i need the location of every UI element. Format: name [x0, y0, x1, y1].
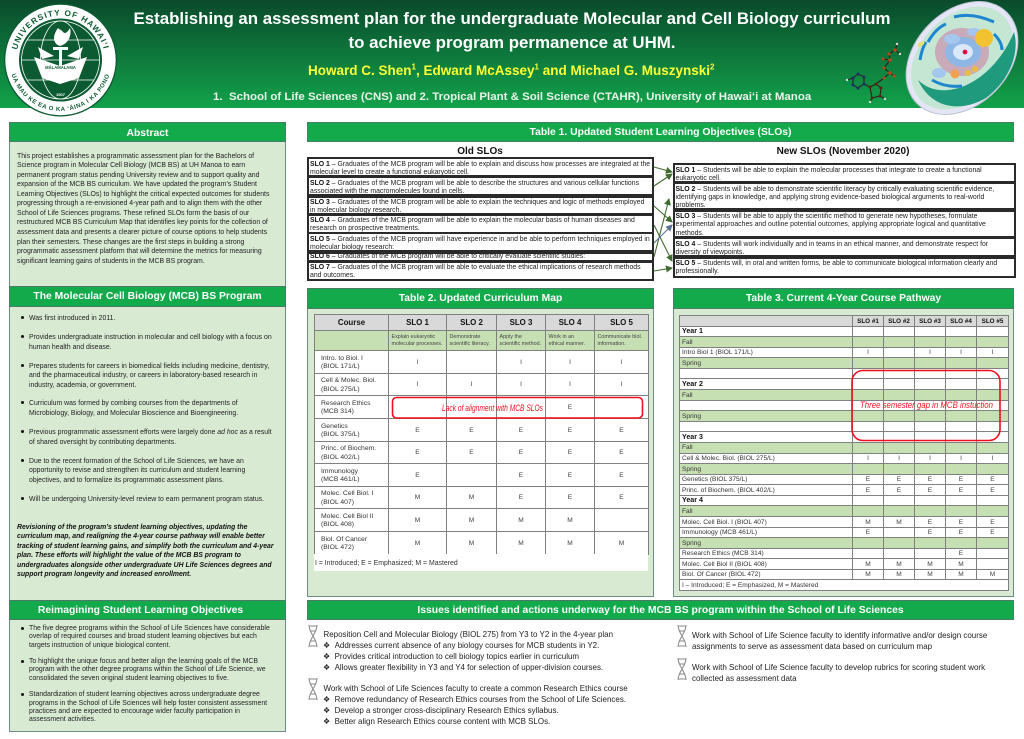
program bullet list: objectives, and to formalize its programmatic assessment plans.	[29, 476, 224, 484]
program bullet list: human health and disease.	[29, 344, 112, 350]
new SLO list: identifying gaps in knowledge, and applying strong evidence-based biological arguments to real-world	[676, 194, 984, 201]
old SLO list: SLO 1 – Graduates of the MCB program will be able to explain and discuss how processes are integrated at the	[310, 160, 650, 168]
table: 4-year course pathway: E	[866, 529, 870, 536]
reimagining bullet list	[21, 624, 270, 723]
reimagining bullet list: targets instruction of unique biological content.	[29, 642, 170, 649]
issue block: scoring rubrics: collected as assessment data	[692, 674, 797, 683]
table: curriculum map: information.	[598, 341, 626, 347]
table: 4-year course pathway: Fall	[682, 339, 693, 346]
heading: new SLOs: New SLOs (November 2020)	[777, 146, 909, 156]
table: curriculum map: I	[417, 381, 418, 388]
table: 4-year course pathway: Fall	[682, 392, 693, 399]
table: 4-year course pathway: M	[896, 519, 902, 526]
table: curriculum map: I	[520, 381, 522, 388]
program bullet list: Prepares students for careers in biomedical fields including medicine, dentistry,	[29, 362, 269, 370]
icon: DNA	[678, 625, 686, 647]
arrows: old to new SLO mapping	[654, 166, 673, 272]
table: curriculum map: ethical manner.	[548, 341, 585, 347]
abstract text: significant learning gains of students in the MCB BS program.	[17, 258, 205, 265]
poster title: to achieve program permanence at UHM.	[348, 33, 675, 52]
header banner	[0, 0, 1024, 108]
table: 4-year course pathway: M	[865, 571, 871, 578]
table: 4-year course pathway: Fall	[682, 444, 693, 451]
table: curriculum map: E	[619, 472, 624, 479]
old SLO list: SLO 3 – Graduates of the MCB program will be able to explain the techniques and logic of methods employed	[310, 199, 644, 206]
heading: abstract	[9, 122, 286, 142]
icon: DNA	[678, 658, 686, 680]
table: curriculum map: M	[567, 540, 573, 547]
heading: table 1: Table 1. Updated Student Learning Objectives (SLOs)	[530, 127, 791, 138]
program summary statement: Revisioning of the program’s student learning objectives, updating the	[17, 524, 247, 530]
table: 4-year course pathway: Research Ethics (MCB 314)	[682, 550, 764, 557]
new SLO list	[673, 163, 1016, 278]
heading: old SLOs: Old SLOs	[457, 146, 503, 156]
table: curriculum map: (BIOL 472)	[321, 544, 354, 551]
abstract text: plan their semesters. These changes are the first steps in building a strong	[17, 239, 244, 246]
table: 4-year course pathway: Year 4	[682, 496, 703, 504]
table: curriculum map: SLO 5	[610, 318, 633, 327]
table: 4-year course pathway: Intro Biol 1 (BIOL 171/L)	[682, 349, 753, 356]
table: curriculum map: E	[415, 449, 420, 456]
table: 4-year course pathway: E	[928, 529, 932, 536]
abstract text: School of Life Sciences programs. These refined SLOs form the basis of our	[17, 210, 249, 217]
table: curriculum map: (BIOL 375/L)	[321, 431, 360, 438]
table: curriculum map: E	[619, 494, 624, 501]
table: curriculum map: E	[568, 494, 572, 501]
issue block: assessment assignments	[678, 625, 987, 650]
table: curriculum map: Explain eukaryotic	[392, 334, 435, 340]
table: curriculum map: E	[469, 449, 474, 456]
table: 4-year course pathway: Genetics (BIOL 375/L)	[682, 476, 747, 483]
table: 4-year course pathway: E	[959, 519, 963, 526]
reimagining bullet list: programs in the School of Life Sciences will help foster consistent assessment	[29, 700, 267, 707]
table: 4-year course pathway: I	[929, 349, 931, 356]
program bullet list	[21, 314, 272, 502]
table: curriculum map: E	[415, 472, 420, 479]
program summary statement: tracking of student learning gains, and simplify both the curriculum and 4-year	[17, 543, 274, 550]
abstract text: permanent program status pending University review and to support quality and	[17, 172, 259, 179]
table: curriculum map: E	[568, 404, 572, 411]
heading: MCB BS program: The Molecular Cell Biology (MCB) BS Program	[33, 291, 262, 302]
table: curriculum map: (BIOL 408)	[321, 521, 354, 528]
reimagining bullet list: practices and are expected to encourage wider faculty participation in	[29, 708, 240, 715]
table: curriculum map: Molec. Cell Biol. I	[321, 490, 374, 497]
table: 4-year course pathway: SLO #4	[950, 318, 972, 325]
icon: university seal: UNIVERSITY OF HAWAI‘I	[12, 10, 109, 49]
old SLO list: molecular level to create a functional eukaryotic cell.	[310, 169, 469, 176]
table: curriculum map: M	[415, 494, 420, 501]
old SLO list: molecular biology research:	[310, 244, 394, 251]
table: 4-year course pathway: E	[897, 476, 901, 483]
heading: issues and actions	[307, 600, 1014, 620]
table: 4-year course pathway: Molec. Cell Biol. I (BIOL 407)	[682, 519, 767, 526]
table: curriculum map: SLO 3	[510, 318, 532, 327]
table: curriculum map: M	[415, 517, 420, 524]
old SLO list: SLO 4 – Graduates of the MCB program will be able to explain the molecular basis of human diseases and	[310, 217, 635, 224]
program summary statement: plan. These efforts will highlight the value of the MCB BS program to	[17, 552, 241, 559]
program bullet list: Due to the recent formation of the School of Life Sciences, we have an	[29, 458, 244, 464]
table: 4-year course pathway: M	[896, 571, 902, 578]
table: 4-year course pathway: E	[928, 519, 932, 526]
table: curriculum map: Genetics	[321, 423, 348, 430]
new SLO list: SLO 2 – Students will be able to demonstrate scientific literacy by critically evaluating scientific evidence,	[676, 186, 994, 193]
table: curriculum map: scientific method.	[500, 341, 541, 347]
heading: table 2	[307, 288, 654, 309]
old SLO list: SLO 6 – Graduates of the MCB program will be able to critically evaluate scientific studies:	[310, 252, 585, 260]
new SLO list: SLO 1 – Students will be able to explain the molecular processes that integrate to create a functional	[676, 166, 982, 174]
abstract text: This project establishes a programmatic assessment plan for the Bachelors of	[17, 152, 254, 160]
table: 4-year course pathway: Year 3	[682, 433, 703, 441]
table: 4-year course pathway: Biol. Of Cancer (BIOL 472)	[682, 571, 761, 578]
table: 4-year course pathway: Molec. Cell Biol II (BIOL 408)	[682, 561, 767, 568]
table: curriculum map: I	[569, 359, 571, 366]
reimagining bullet list: To highlight the unique focus and better align the learning goals of the MCB	[29, 658, 258, 665]
heading: abstract: Abstract	[127, 128, 168, 139]
issue block: common research ethics course: ❖ Better align Research Ethics course content with MCB SLOs.	[323, 717, 550, 726]
table: 4-year course pathway: E	[990, 519, 995, 526]
table: 4-year course pathway: I	[992, 455, 993, 462]
icon: DNA	[308, 625, 318, 647]
table: curriculum map: Cell & Molec. Biol.	[321, 377, 376, 384]
table: 4-year course pathway: E	[897, 487, 901, 494]
abstract text: progressing through a re-envisioned 4-year path and to align them with the other	[17, 200, 262, 207]
old SLO list: research on prospective treatments.	[310, 225, 420, 232]
table: curriculum map: Immunology	[321, 468, 358, 475]
table: curriculum map: Communicate biol.	[598, 334, 642, 340]
icon: university seal: MĀLAMALAMA	[45, 65, 76, 70]
table: curriculum map: Apply the	[500, 334, 522, 340]
new SLO list: SLO 4 – Students will work individually and in teams in an ethical manner, and demonstrate respect for	[676, 240, 988, 248]
new SLO list: SLO 3 – Students will be able to apply the scientific method to generate new hypotheses, formulate	[676, 213, 977, 220]
authors: Howard C. Shen1, Edward McAssey1 and Michael G. Muszynski2	[308, 62, 714, 78]
old SLO list: associated with the macromolecules found in cells.	[310, 188, 464, 195]
program summary statement	[16, 524, 274, 578]
issue block: common research ethics course: ❖ Remove redundancy of Research Ethics courses from the School of Life Sciences.	[323, 695, 626, 704]
program bullet list: Will be undergoing University-level review to earn permanent program status.	[29, 496, 264, 502]
table: curriculum map: Biol. Of Cancer	[321, 536, 367, 543]
table: 4-year course pathway: E	[866, 476, 870, 483]
abstract text: programmatic assessment platform that will determine the metrics for measuring	[17, 248, 262, 255]
old SLO list	[307, 157, 654, 281]
callout: lack of alignment: Lack of alignment with MCB SLOs	[442, 403, 543, 413]
table: curriculum map: (BIOL 275/L)	[321, 386, 360, 392]
table: 4-year course pathway: I – Introduced; E = Emphasized, M = Mastered	[682, 582, 818, 589]
reimagining bullet list: The five degree programs within the School of Life Sciences have considerable	[29, 625, 270, 632]
icon: eukaryotic cell	[906, 1, 1018, 115]
program bullet list: Microbiology, Biology, and Molecular Bioscience and Bioengineering.	[29, 410, 238, 416]
issue block: reposition BIOL 275	[308, 625, 613, 672]
table: curriculum map: E	[568, 449, 572, 456]
abstract text: expansion of the MCB BS curriculum. We have updated the program’s Student	[17, 181, 257, 188]
icon: university seal	[4, 4, 117, 116]
table: curriculum map: (BIOL 402/L)	[321, 454, 360, 460]
program bullet list: opportunity to revise and strengthen its curriculum and student learning	[29, 467, 245, 474]
abstract text: assessment data and presents a clearer picture of course options to help students	[17, 229, 267, 236]
program bullet list: Curriculum was formed by combing courses from the departments of	[29, 400, 238, 407]
table: curriculum map: (BIOL 407)	[321, 498, 354, 506]
reimagining bullet list: Standardization of student learning objectives across undergraduate degree	[29, 691, 260, 698]
heading: table 3	[673, 288, 1014, 309]
table: 4-year course pathway: M	[927, 571, 933, 578]
table: 4-year course pathway: Spring	[682, 413, 701, 420]
affiliations: 1. School of Life Sciences (CNS) and 2. Tropical Plant & Soil Science (CTAHR), University of Hawai‘i at Manoa	[213, 91, 811, 103]
issue block: reposition BIOL 275: ❖ Addresses current absence of any biology courses for MCB students in Y2.	[323, 641, 599, 650]
table: 4-year course pathway: E	[959, 550, 963, 557]
old SLO list: in molecular biology research.	[310, 207, 401, 214]
program bullet list: Provides undergraduate instruction in molecular and cell biology with a focus on	[29, 334, 272, 341]
table: curriculum map: Work in an	[548, 334, 574, 340]
table: 4-year course pathway: I	[898, 455, 900, 462]
abstract text	[17, 152, 270, 265]
table: 4-year course pathway: E	[866, 487, 870, 494]
table: curriculum map: E	[619, 427, 624, 434]
table: 4-year course pathway: M	[865, 519, 871, 526]
issue block: reposition BIOL 275: ❖ Provides critical introduction to cell biology topics earlier in curriculum	[323, 652, 579, 661]
old SLO list: SLO 2 – Graduates of the MCB program will be able to describe the structures and various cellular functions	[310, 180, 639, 186]
table: curriculum map: Molec. Cell Biol II	[321, 513, 374, 520]
issue block: common research ethics course: ❖ Develop a stronger cross-disciplinary Research Ethics syllabus.	[323, 706, 559, 715]
new SLO list: SLO 5 – Students will, in oral and written forms, be able to communicate biological information clearly and	[676, 260, 997, 267]
panel: table 3	[673, 288, 1014, 597]
table: curriculum map: E	[568, 472, 572, 479]
issue block: assessment assignments: assignments to serve as assessment data based on curriculum map	[692, 642, 932, 650]
new SLO list: eukaryotic cell.	[676, 175, 721, 182]
table: curriculum map: I	[520, 359, 522, 366]
heading: MCB BS program	[9, 286, 286, 307]
table: 4-year course pathway: M	[958, 561, 964, 568]
table: 4-year course pathway: I	[960, 349, 962, 356]
table: 4-year course pathway: SLO #1	[857, 318, 879, 325]
table: 4-year course pathway: SLO #3	[919, 318, 941, 325]
table: 4-year course pathway: M	[958, 571, 964, 578]
table: 4-year course pathway: Cell & Molec. Biol. (BIOL 275/L)	[682, 455, 775, 462]
table: curriculum map: I	[569, 381, 571, 388]
table: curriculum map: I	[621, 359, 622, 366]
reimagining bullet list: consolidated the seven original student learning objectives to five.	[29, 675, 229, 682]
table: 4-year course pathway: SLO #5	[982, 318, 1003, 325]
table: 4-year course pathway: Spring	[682, 360, 701, 367]
heading: reimagining SLOs	[9, 600, 286, 620]
table: 4-year course pathway: M	[990, 571, 995, 578]
table: curriculum map: M	[469, 517, 474, 524]
issue block: common research ethics course	[308, 678, 628, 726]
table: curriculum map: I	[471, 381, 472, 388]
old SLO list: SLO 7 – Graduates of the MCB program will be able to evaluate the ethical implications of research methods	[310, 264, 641, 271]
icon: university seal: 1907	[56, 92, 66, 97]
panel: table 2	[307, 288, 654, 597]
abstract text: Learning Objectives (SLOs) to highlight the critical expected outcomes for students	[17, 191, 269, 198]
table: 4-year course pathway: M	[896, 561, 902, 568]
reimagining bullet list: assessment activities.	[29, 716, 96, 723]
table: curriculum map: Princ. of Biochem.	[321, 445, 376, 452]
table: curriculum map: Course	[338, 318, 365, 327]
reimagining bullet list: overlap of required courses and broad student learning objectives but each	[29, 633, 257, 640]
table: curriculum map: SLO 4	[559, 318, 581, 327]
reimagining bullet list: program with the other degree programs within the School of Life Science, we	[29, 666, 266, 673]
old SLO list: SLO 5 – Graduates of the MCB program will have experience in and be able to perform techniques employed in	[310, 236, 650, 242]
table: 4-year course pathway: I	[992, 349, 993, 356]
issue block: scoring rubrics	[678, 658, 985, 683]
table: 4-year course pathway: M	[865, 561, 871, 568]
table: curriculum map: E	[469, 427, 474, 434]
table: 4-year course pathway: E	[990, 476, 995, 483]
table: curriculum map: Intro. to Biol. I	[321, 355, 363, 362]
table: curriculum map: E	[519, 427, 523, 434]
table: curriculum map: Research Ethics	[321, 400, 370, 407]
heading: table 1	[307, 122, 1014, 142]
table: curriculum map: E	[619, 449, 624, 456]
panel: abstract	[9, 122, 286, 287]
table: 4-year course pathway: Year 2	[682, 380, 703, 388]
program bullet list: and the pharmaceutical industry, or careers in laboratory-based research in	[29, 372, 257, 379]
table: 4-year course pathway: M	[927, 561, 933, 568]
table: curriculum map: M	[469, 540, 474, 547]
table: 4-year course pathway: I	[929, 455, 931, 462]
table: 4-year course pathway: Spring	[682, 540, 701, 547]
new SLO list: methods.	[676, 230, 704, 237]
table 2 legend	[314, 554, 648, 571]
abstract text: restructured MCB BS Curriculum Map that identifies key points for the collection of	[17, 219, 268, 226]
table: curriculum map: I	[621, 381, 622, 388]
table: curriculum map: M	[567, 517, 573, 524]
issue block: scoring rubrics: Work with School of Life Science faculty to develop rubrics for scoring student work	[692, 663, 985, 672]
table: curriculum map: E	[519, 449, 523, 456]
table: 4-year course pathway: E	[928, 476, 932, 483]
heading: table 2: Table 2. Updated Curriculum Map	[399, 293, 562, 304]
table: curriculum map: SLO 1	[406, 318, 429, 327]
icon: university seal: UA MAU KE EA O KA ‘ĀINA I KA PONO	[12, 73, 109, 111]
new SLO list: experimental approaches and outline potential outcomes, applying appropriate logical and quantitative	[676, 221, 986, 228]
table: 4-year course pathway: E	[990, 529, 995, 536]
issue block: reposition BIOL 275: Reposition Cell and Molecular Biology (BIOL 275) from Y3 to Y2 in the 4-year plan	[324, 630, 613, 639]
program bullet list: industry, academia, or government.	[29, 382, 136, 388]
table: curriculum map: scientific literacy.	[450, 341, 490, 347]
table: 4-year course pathway: SLO #2	[888, 318, 910, 325]
callout: three semester gap	[851, 370, 1001, 442]
table: 4-year course pathway: I	[867, 455, 869, 462]
program summary statement: curriculum map, and realigning the 4-year course pathway will enable better	[17, 533, 265, 540]
table: 4-year course pathway: E	[990, 487, 995, 494]
table: curriculum map: E	[568, 427, 572, 434]
table: 4-year course pathway: Princ. of Biochem. (BIOL 402/L)	[682, 487, 775, 494]
table: curriculum map: M	[415, 540, 420, 547]
table: 4-year course pathway: Fall	[682, 508, 693, 515]
table: curriculum map: SLO 2	[460, 318, 483, 327]
table: 4-year course pathway: I	[867, 349, 869, 356]
table: curriculum map: M	[469, 494, 474, 501]
new SLO list: diversity of viewpoints.	[676, 249, 744, 256]
table: curriculum map: (BIOL 171/L)	[321, 363, 360, 370]
table: curriculum map: (MCB 314)	[321, 408, 354, 415]
table: 4-year course pathway: Year 1	[682, 327, 703, 335]
program summary statement: support program longevity and increased enrollment.	[17, 571, 191, 578]
table: 4-year course pathway	[679, 315, 1009, 591]
new SLO list: problems.	[676, 202, 706, 209]
issue block: common research ethics course: Work with School of Life Sciences faculty to create a common Research Ethics course	[324, 684, 628, 693]
old SLO list: and outcomes.	[310, 272, 355, 279]
table 2 legend: I = Introduced; E = Emphasized; M = Mastered	[315, 560, 458, 567]
heading: issues and actions: Issues identified and actions underway for the MCB BS program within the School of Life Sciences	[417, 605, 904, 616]
program bullet list: Previous programmatic assessment efforts were largely done ad hoc as a result	[29, 429, 272, 436]
program bullet list: of shared oversight by contributing departments.	[29, 438, 176, 446]
abstract text: Science program in Molecular Cell Biology (MCB BS) at UH Manoa to earn	[17, 162, 245, 169]
table: 4-year course pathway: E	[959, 476, 963, 483]
table: curriculum map: E	[519, 494, 523, 501]
issue block: assessment assignments: Work with School of Life Science faculty to identify informative and/or design course	[692, 630, 987, 640]
panel: reimagining SLOs	[9, 600, 286, 732]
poster title	[134, 9, 890, 52]
issue block: reposition BIOL 275: ❖ Allows greater flexibility in Y3 and Y4 for selection of upper-division courses.	[323, 663, 603, 672]
callout: lack of alignment	[392, 396, 644, 419]
table: curriculum map: molecular processes.	[392, 341, 442, 347]
table: 4-year course pathway: E	[928, 487, 932, 494]
table: curriculum map	[314, 314, 649, 555]
table: curriculum map: M	[619, 540, 624, 547]
table: curriculum map: Demonstrate	[450, 334, 480, 340]
table: curriculum map: E	[519, 472, 523, 479]
table: curriculum map: E	[415, 427, 420, 434]
program bullet list: Was first introduced in 2011.	[29, 314, 115, 322]
icon: DNA	[308, 678, 318, 700]
table: 4-year course pathway: E	[959, 529, 963, 536]
table: curriculum map: M	[518, 517, 524, 524]
table: 4-year course pathway: Spring	[682, 466, 701, 473]
poster title: Establishing an assessment plan for the undergraduate Molecular and Cell Biology curriculum	[134, 9, 890, 28]
table: curriculum map: (MCB 461/L)	[321, 476, 360, 483]
table: 4-year course pathway: Immunology (MCB 461/L)	[682, 529, 757, 536]
table: curriculum map: I	[417, 359, 418, 366]
table: curriculum map: M	[518, 540, 524, 547]
icon: ATP molecule	[846, 42, 902, 104]
new SLO list: professionally.	[676, 268, 719, 275]
heading: table 3: Table 3. Current 4-Year Course Pathway	[746, 293, 941, 304]
table: 4-year course pathway: I	[960, 455, 962, 462]
panel: MCB BS program	[9, 286, 286, 602]
heading: reimagining SLOs: Reimagining Student Learning Objectives	[38, 605, 243, 616]
table: 4-year course pathway: E	[959, 487, 963, 494]
program summary statement: undergraduates alongside other undergraduate UH Life Sciences degrees and	[17, 562, 272, 569]
